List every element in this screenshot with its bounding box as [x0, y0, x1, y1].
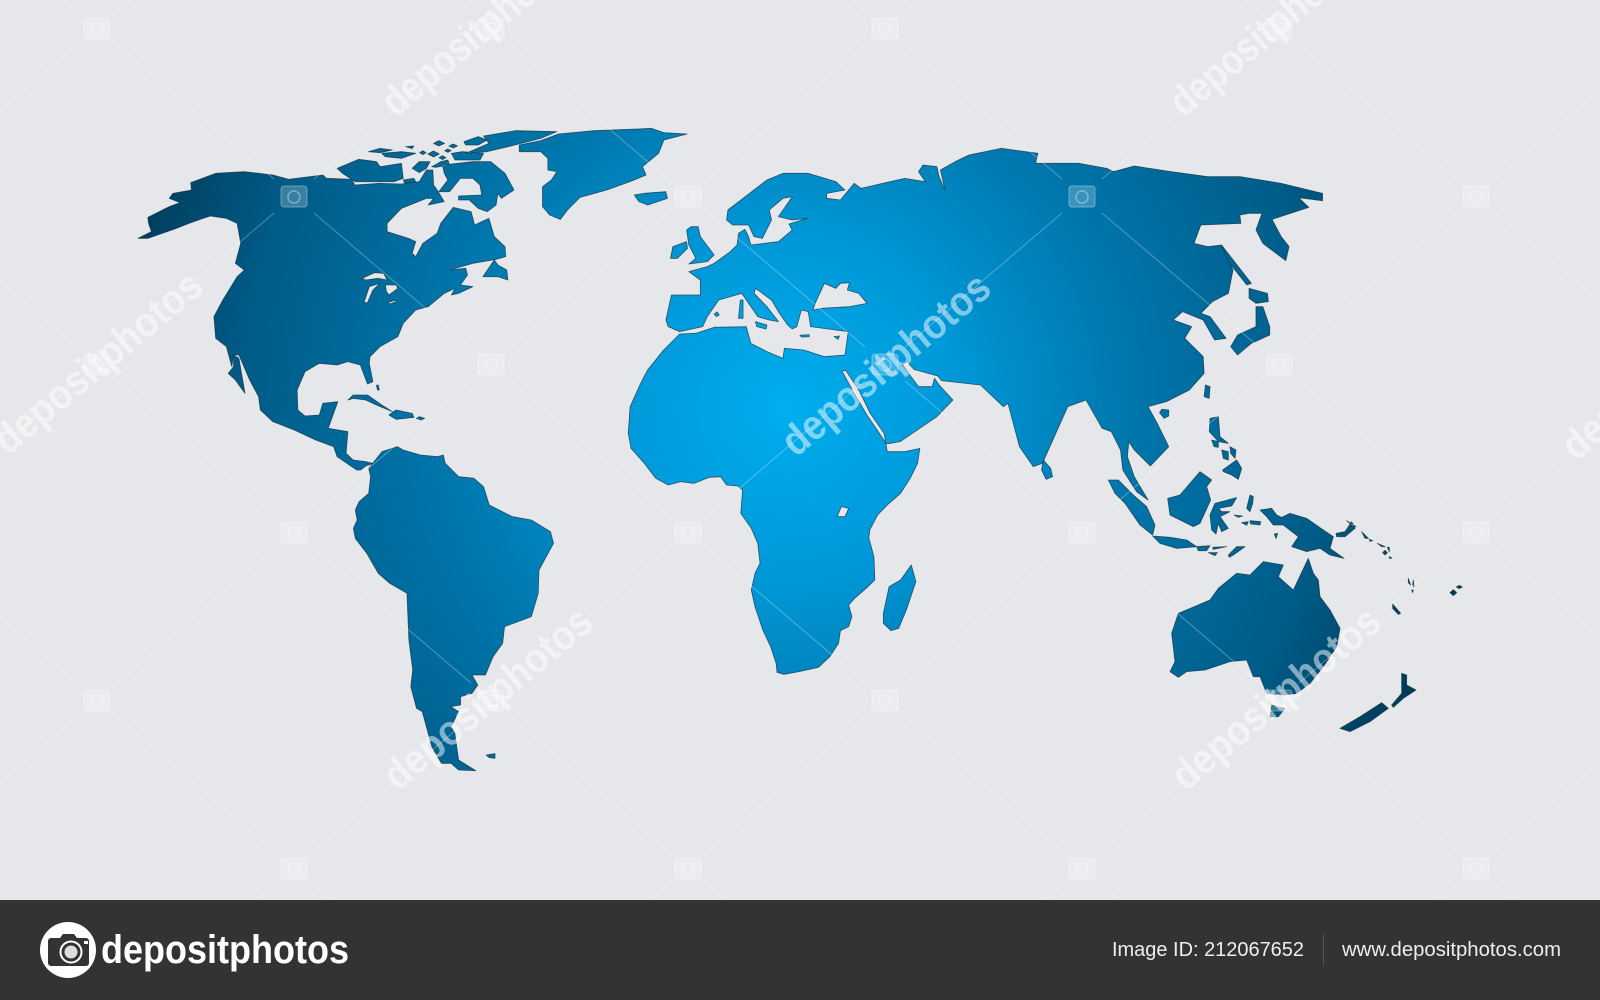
mediterranean islands	[714, 300, 839, 339]
tasmania	[1270, 705, 1285, 717]
caribbean islands	[348, 385, 425, 420]
newfoundland	[483, 260, 508, 280]
sri lanka	[1042, 460, 1053, 479]
south america	[353, 447, 554, 771]
great britain	[687, 227, 714, 264]
eurasia and africa	[628, 148, 1323, 674]
footer bar	[0, 900, 1600, 1000]
japan and sakhalin	[1222, 245, 1270, 355]
new guinea	[1260, 508, 1344, 558]
taiwan and hainan	[1160, 385, 1210, 418]
iceland	[634, 192, 667, 205]
watermark text	[0, 0, 1600, 799]
north america	[138, 170, 506, 470]
watermark text: depositphotos	[374, 597, 601, 799]
arctic archipelago	[337, 131, 557, 212]
ireland	[671, 242, 687, 258]
indonesia and philippines	[1108, 417, 1278, 557]
greenland	[519, 128, 687, 219]
world map	[138, 128, 1462, 771]
logo wordmark: depositphotos	[101, 928, 349, 972]
australia	[1170, 558, 1340, 695]
new zealand	[1340, 673, 1416, 732]
madagascar	[883, 565, 916, 631]
baja california	[228, 355, 245, 393]
image id: Image ID: 212067652	[1112, 939, 1304, 961]
icon: camera logo	[40, 922, 96, 978]
falkland islands	[486, 754, 495, 758]
watermark text: depositphotos	[1162, 597, 1389, 799]
watermark text: depositphotos	[772, 263, 999, 465]
pacific islands	[1336, 521, 1462, 614]
website url: www.depositphotos.com	[1341, 939, 1561, 961]
